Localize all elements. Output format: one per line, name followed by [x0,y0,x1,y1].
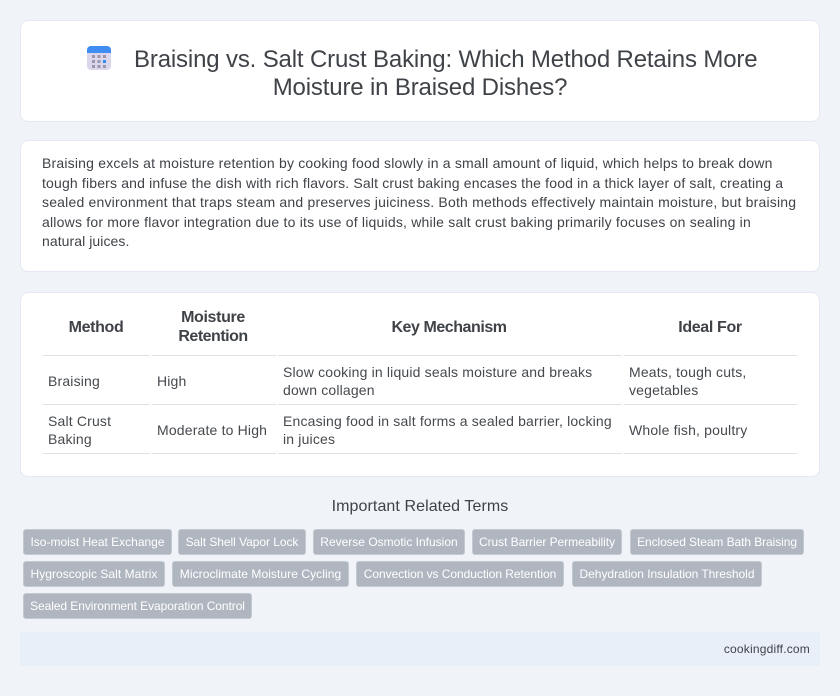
row: braising: down collagen [283,382,375,398]
summary paragraph: natural juices. [42,233,129,249]
row: salt crust baking: Moderate to High [157,422,267,438]
tags: related terms [23,529,804,619]
tags: related terms: Sealed Environment Evaporation Control [30,599,245,613]
table header: Method [69,319,123,336]
panel: comparison table [20,292,820,477]
tags: related terms: Crust Barrier Permeability [479,535,615,549]
table header: Key Mechanism [391,319,507,336]
icon: calendar grid [87,46,111,70]
summary paragraph: tough fibers and infuse the dish with rich flavors. Salt crust baking encases the food in a thick layer of salt, creating a [42,175,783,191]
title line 1: Braising vs. Salt Crust Baking: Which Method Retains More [134,46,757,73]
summary paragraph: allows for more flavor integration due to its use of liquids, while salt crust baking primarily focuses on sealing in [42,214,751,230]
tags: related terms: Reverse Osmotic Infusion [320,535,458,549]
tags: related terms: Dehydration Insulation Threshold [580,567,754,581]
row: salt crust baking [43,413,797,454]
table header: Moisture [181,309,245,326]
title line 2: Moisture in Braised Dishes? [273,74,567,101]
tags: related terms: Convection vs Conduction Retention [364,567,556,581]
row: braising [43,364,797,405]
row: braising: Braising [48,373,100,389]
row: salt crust baking: Salt Crust [48,413,111,429]
tags: related terms: Enclosed Steam Bath Braising [637,535,797,549]
table header [43,309,797,356]
footer source: cookingdiff.com [724,642,810,656]
row: braising: High [157,373,186,389]
row: salt crust baking: Whole fish, poultry [629,422,747,438]
heading: related terms: Important Related Terms [332,498,508,515]
row: braising: Slow cooking in liquid seals moisture and breaks [283,364,592,380]
table header: Ideal For [678,319,742,336]
footer bar [20,632,820,666]
summary paragraph: Braising excels at moisture retention by cooking food slowly in a small amount of liquid, which helps to break down [42,155,773,171]
row: braising: Meats, tough cuts, [629,364,746,380]
tags: related terms: Salt Shell Vapor Lock [186,535,298,549]
tags: related terms: Iso-moist Heat Exchange [30,535,165,549]
row: salt crust baking: Encasing food in salt forms a sealed barrier, locking [283,413,612,429]
panel: summary text [20,140,820,272]
summary paragraph: sealed environment that traps steam and preserves juiciness. Both methods effectively maintain moisture, but braising [42,194,796,210]
panel: title card [20,20,820,122]
tags: related terms: Hygroscopic Salt Matrix [31,567,157,581]
summary paragraph [42,155,796,249]
row: salt crust baking: Baking [48,431,92,447]
tags: related terms: Microclimate Moisture Cycling [180,567,341,581]
row: braising: vegetables [629,382,698,398]
row: salt crust baking: in juices [283,431,335,447]
table header: Retention [178,328,248,345]
